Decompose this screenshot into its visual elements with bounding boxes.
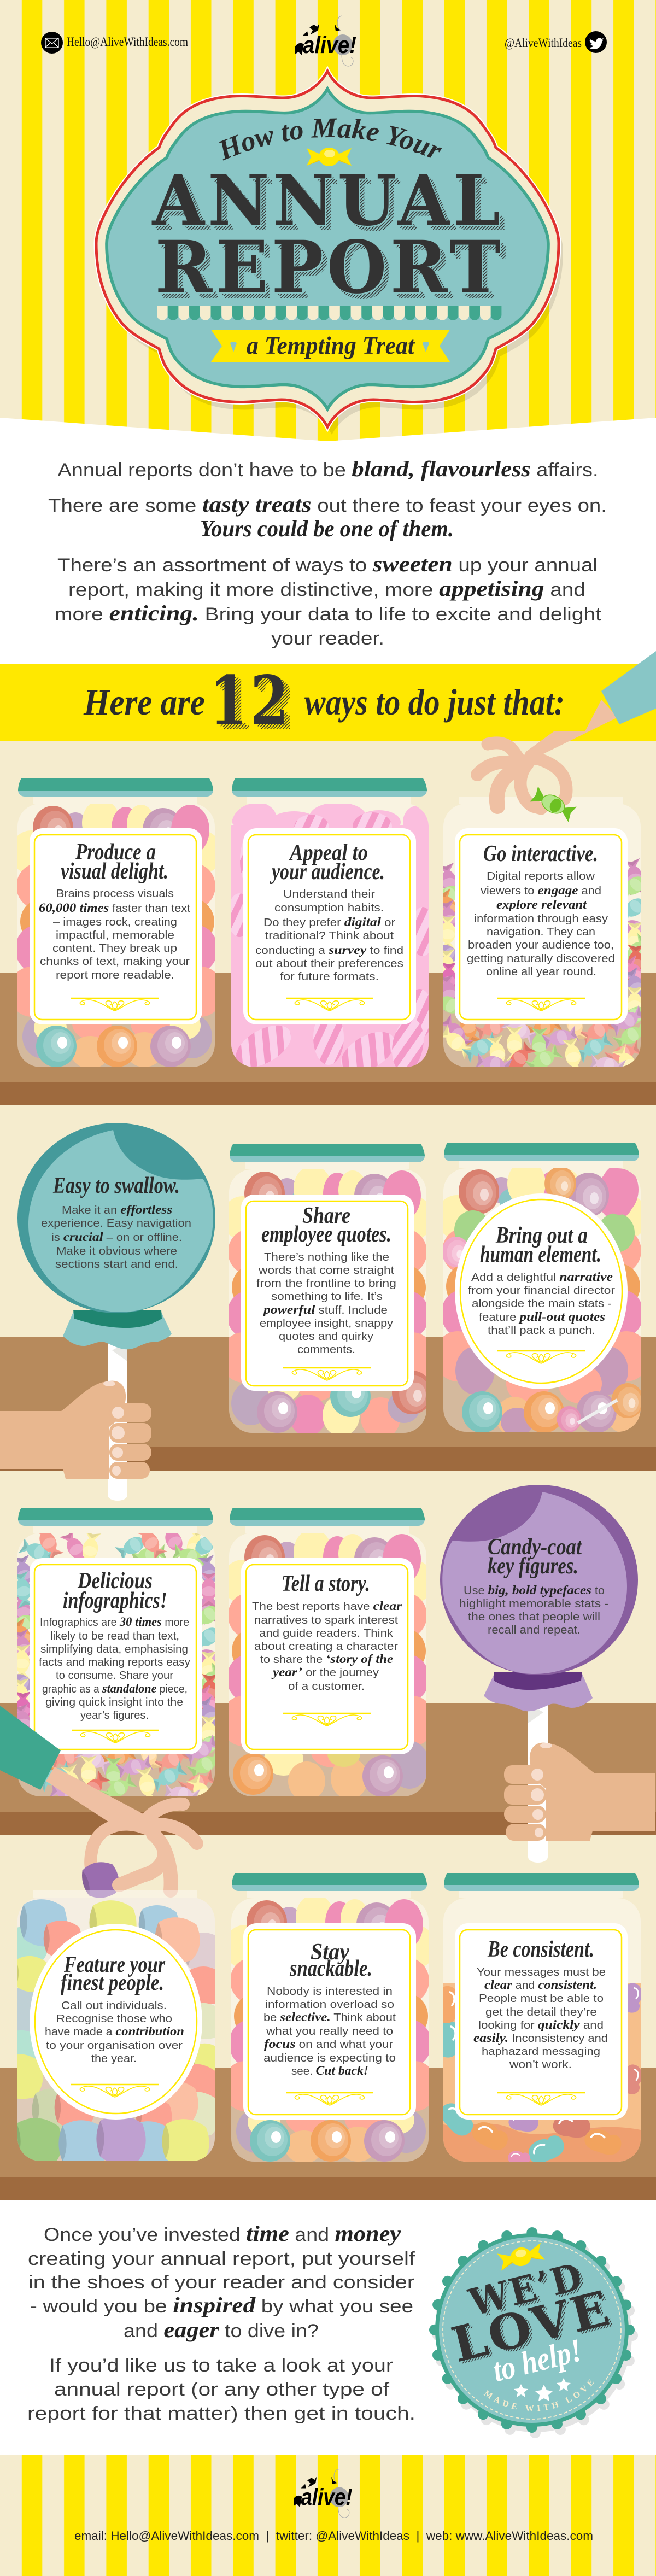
jar 3: go interactive: Go interactive. bbox=[483, 841, 598, 867]
closing text: If you’d like us to take a look at your bbox=[49, 2355, 393, 2376]
annual report heading: REPORT bbox=[156, 226, 505, 311]
lollipop: easy to swallow: Easy to swallow. bbox=[52, 1173, 180, 1198]
footer logo bbox=[294, 2469, 353, 2518]
jar 11: stay snackable: information overload so bbox=[265, 1999, 394, 2011]
yellow band background bbox=[0, 664, 656, 741]
jar 7: tell a story bbox=[220, 1508, 435, 1801]
jar 1: produce a visual delight: impactful, memorable bbox=[56, 929, 174, 941]
jar 1: produce a visual delight: chunks of text, making your bbox=[40, 956, 190, 968]
jar 6: delicious infographics: graphic as a standalone piece, bbox=[42, 1682, 188, 1695]
jar 7: tell a story: of a customer. bbox=[288, 1681, 365, 1693]
jar 7: tell a story: to share the ‘story of the bbox=[260, 1652, 393, 1666]
jar 6: delicious infographics: likely to be read than text, bbox=[50, 1630, 179, 1642]
jar 10: feature your finest people: finest people. bbox=[61, 1970, 164, 1995]
twitter contact: @AliveWithIdeas bbox=[505, 36, 582, 50]
heading: here are 12 ways bbox=[83, 661, 565, 746]
lollipop: easy to swallow: sections start and end. bbox=[55, 1258, 178, 1271]
badge: we'd love to help bbox=[429, 2227, 638, 2438]
lollipop: candy-coat key figures: Candy-coat bbox=[488, 1535, 582, 1560]
jar 12: be consistent: easily. Inconsistency and bbox=[473, 2031, 608, 2045]
jar 6: delicious infographics: to consume. Share your bbox=[56, 1670, 173, 1682]
jar 7: tell a story: narratives to spark interest bbox=[254, 1614, 398, 1626]
hand picking green candy bbox=[477, 700, 618, 822]
icon: yellow candy bbox=[307, 148, 352, 166]
closing text: report for that matter) then get in touch. bbox=[27, 2403, 415, 2424]
jar 5: bring out a human element: that’ll pack a punch. bbox=[488, 1325, 595, 1337]
jar 6: delicious infographics bbox=[17, 1508, 215, 1796]
jar 4: share employee quotes: employee insight, snappy bbox=[260, 1318, 393, 1330]
lollipop: candy-coat key figures: key figures. bbox=[488, 1554, 578, 1579]
badge headline: LOVE bbox=[446, 2279, 617, 2373]
jar 6: delicious infographics: Delicious bbox=[77, 1568, 153, 1594]
jar 4: share employee quotes: quotes and quirky bbox=[279, 1331, 373, 1343]
jar 10: feature your finest people bbox=[17, 1890, 215, 2161]
jar 4: share employee quotes: Share bbox=[302, 1203, 350, 1228]
badge headline: WE’D bbox=[467, 2256, 591, 2327]
hand picking purple candy bbox=[46, 1767, 197, 1902]
lollipop: candy-coat key figures: recall and repeat. bbox=[488, 1624, 581, 1636]
lollipop: candy-coat key figures: the ones that people will bbox=[468, 1611, 600, 1623]
closing text: and eager to dive in? bbox=[124, 2317, 319, 2342]
jar 6: delicious infographics: Infographics are 30 times more bbox=[40, 1615, 189, 1629]
jar 2: appeal to your audience: for future formats. bbox=[280, 971, 379, 983]
footer stripes bbox=[0, 2455, 656, 2576]
jar 12: be consistent: Be consistent. bbox=[487, 1937, 594, 1962]
jar 4: share employee quotes: from the frontline to bring bbox=[256, 1278, 396, 1290]
jar 7: tell a story: about creating a character bbox=[254, 1641, 398, 1653]
footer contact line: email: Hello@AliveWithIdeas.com | twitter: @AliveWithIdeas | web: www.AliveWithIdeas.com bbox=[74, 2529, 593, 2543]
awning stripes bbox=[157, 306, 501, 320]
lollipop: easy to swallow bbox=[0, 1123, 215, 1501]
jar 11: stay snackable: focus on and what your bbox=[264, 2037, 393, 2051]
annual report heading: ANNUAL bbox=[157, 166, 509, 247]
icon: stars bbox=[514, 2378, 571, 2401]
jar 1: produce a visual delight: 60,000 times faster than text bbox=[39, 901, 190, 915]
annual report heading: REPORT bbox=[159, 229, 507, 313]
jar 3: go interactive: broaden your audience too, bbox=[468, 939, 614, 951]
jar 11: stay snackable: be selective. Think about bbox=[263, 2010, 396, 2024]
icon: envelope bbox=[41, 32, 63, 54]
jar 2: appeal to your audience bbox=[227, 778, 435, 1081]
ribbon: a tempting treat bbox=[211, 330, 450, 362]
jar 6: delicious infographics: simplifying data, emphasising bbox=[40, 1643, 188, 1655]
number 12: 12 bbox=[213, 664, 295, 743]
annual report heading bbox=[152, 160, 509, 315]
jar 10: feature your finest people: to your organisation over bbox=[46, 2040, 183, 2052]
intro text: report, making it more distinctive, more appetising and bbox=[68, 576, 585, 601]
jar 4: share employee quotes: There’s nothing like the bbox=[264, 1251, 389, 1263]
annual report heading: ANNUAL bbox=[153, 161, 505, 242]
jar 11: stay snackable: what you really need to bbox=[266, 2025, 393, 2038]
jar 12: be consistent: looking for quickly and bbox=[478, 2018, 604, 2031]
lollipop: candy-coat key figures bbox=[440, 1485, 655, 1863]
jar 1: produce a visual delight: Produce a bbox=[75, 840, 156, 865]
email contact: Hello@AliveWithIdeas.com bbox=[67, 35, 188, 49]
jar 5: bring out a human element: Add a delightful narrative bbox=[471, 1270, 613, 1284]
closing text: annual report (or any other type of bbox=[54, 2379, 390, 2400]
jar 1: produce a visual delight: Brains process visuals bbox=[56, 888, 174, 900]
badge headline bbox=[439, 2249, 625, 2397]
jar 2: appeal to your audience: Do they prefer digital or bbox=[263, 915, 395, 929]
heading: here are 12 ways: ways to do just that: bbox=[304, 681, 565, 723]
lollipop: easy to swallow: Make it an effortless bbox=[62, 1203, 172, 1216]
jar 1: produce a visual delight: visual delight. bbox=[61, 859, 168, 884]
jar 7: tell a story: Tell a story. bbox=[282, 1571, 370, 1596]
jar 3: go interactive: information through easy bbox=[474, 913, 608, 925]
lollipop: easy to swallow: Make it obvious where bbox=[56, 1245, 177, 1257]
jar 3: go interactive: navigation. They can bbox=[487, 926, 595, 938]
jar 12: be consistent: People must be able to bbox=[479, 1993, 604, 2005]
title badge bbox=[94, 66, 563, 434]
icon: yellow candy bbox=[497, 2243, 545, 2271]
jar 6: delicious infographics: giving quick insight into the bbox=[45, 1696, 183, 1708]
jar 3: go interactive: getting naturally discovered bbox=[467, 953, 615, 965]
badge subtitle: how to make your: How to Make Your bbox=[219, 118, 442, 161]
jar 12: be consistent: Your messages must be bbox=[477, 1966, 606, 1978]
badge headline: LOVE bbox=[449, 2281, 620, 2375]
closing text: in the shoes of your reader and consider bbox=[28, 2272, 414, 2293]
jar 2: appeal to your audience: traditional? Think about bbox=[265, 930, 394, 942]
intro text: There’s an assortment of ways to sweeten up your annual bbox=[57, 552, 598, 576]
jar 4: share employee quotes: something to life. It’s bbox=[271, 1291, 383, 1303]
lollipop: easy to swallow: experience. Easy navigation bbox=[41, 1217, 191, 1230]
annual report heading: ANNUAL bbox=[152, 160, 504, 241]
jar 10: feature your finest people: Call out individuals. bbox=[61, 2000, 167, 2012]
jar 3: go interactive: viewers to engage and bbox=[481, 883, 601, 897]
jar 2: appeal to your audience: Appeal to bbox=[288, 840, 368, 865]
jar 4: share employee quotes: comments. bbox=[297, 1344, 355, 1356]
logo: alive: alive! bbox=[303, 32, 356, 58]
jar 2: appeal to your audience: out about their preferences bbox=[255, 958, 403, 970]
jar 4: share employee quotes: words that come straight bbox=[258, 1264, 395, 1277]
jar 4: share employee quotes: powerful stuff. Include bbox=[262, 1303, 388, 1316]
jar 2: appeal to your audience: consumption habits. bbox=[274, 902, 384, 914]
jar 1: produce a visual delight: content. They break up bbox=[52, 942, 177, 955]
jar 3: go interactive: Digital reports allow bbox=[487, 870, 595, 882]
jar 11: stay snackable: see. Cut back! bbox=[291, 2064, 368, 2077]
lollipop: easy to swallow: is crucial – on or offline. bbox=[51, 1230, 182, 1244]
number 12: 12 bbox=[216, 666, 298, 746]
jar 5: bring out a human element: human element. bbox=[480, 1242, 601, 1267]
closing text bbox=[27, 2221, 415, 2424]
jar 3: go interactive: explore relevant bbox=[496, 898, 587, 911]
jar 10: feature your finest people: Recognise those who bbox=[56, 2013, 172, 2025]
icon: twitter bird bbox=[585, 31, 607, 53]
jar 12: be consistent: won’t work. bbox=[509, 2059, 572, 2071]
jar 2: appeal to your audience: Understand their bbox=[283, 888, 375, 900]
jar 4: share employee quotes bbox=[229, 1144, 426, 1433]
jar 11: stay snackable: Stay bbox=[311, 1940, 349, 1965]
header striped background bbox=[0, 0, 656, 441]
ribbon: a tempting treat: a Tempting Treat bbox=[247, 331, 415, 359]
jar 7: tell a story: and guide readers. Think bbox=[259, 1627, 394, 1640]
jar 5: bring out a human element: alongside the main stats - bbox=[472, 1298, 612, 1310]
jar 2: appeal to your audience: conducting a survey to find bbox=[255, 943, 403, 957]
jar 11: stay snackable: audience is expecting to bbox=[263, 2052, 396, 2064]
lollipop: candy-coat key figures: highlight memorable stats - bbox=[459, 1598, 608, 1610]
jar 12: be consistent: haphazard messaging bbox=[482, 2046, 600, 2058]
jar 12: be consistent bbox=[435, 1873, 642, 2169]
intro text bbox=[48, 456, 607, 649]
sleeve: teal bbox=[601, 651, 656, 724]
footer logo: alive! bbox=[301, 2484, 353, 2510]
lollipop: candy-coat key figures: Use big, bold typefaces to bbox=[464, 1583, 605, 1597]
icon: green wrapped candy bbox=[530, 786, 577, 822]
jar 10: feature your finest people: the year. bbox=[91, 2053, 137, 2065]
annual report heading: REPORT bbox=[155, 225, 504, 310]
arc text: made with love: MADE WITH LOVE bbox=[483, 2379, 594, 2411]
jar 11: stay snackable: snackable. bbox=[289, 1956, 372, 1981]
sleeve: green bbox=[0, 1706, 61, 1790]
closing text: - would you be inspired by what you see bbox=[30, 2293, 413, 2317]
badge headline: WE’D bbox=[464, 2255, 588, 2325]
jar 12: be consistent: clear and consistent. bbox=[484, 1978, 597, 1992]
jar 6: delicious infographics: infographics! bbox=[63, 1588, 167, 1613]
closing text: Once you’ve invested time and money bbox=[44, 2221, 401, 2246]
jar 3: go interactive bbox=[443, 797, 641, 1067]
jar 4: share employee quotes: employee quotes. bbox=[261, 1222, 391, 1247]
jar 10: feature your finest people: have made a contribution bbox=[45, 2024, 184, 2038]
jar 10: feature your finest people: Feature your bbox=[63, 1952, 166, 1977]
jar 7: tell a story: The best reports have clear bbox=[252, 1599, 402, 1613]
shelves background bbox=[0, 741, 656, 2200]
intro text: your reader. bbox=[271, 628, 384, 649]
intro text: Yours could be one of them. bbox=[200, 517, 454, 542]
jar 12: be consistent: get the detail they’re bbox=[485, 2006, 597, 2018]
annual report heading: ANNUAL bbox=[155, 163, 507, 244]
jar 6: delicious infographics: facts and making reports easy bbox=[39, 1656, 190, 1668]
jar 5: bring out a human element: from your financial director bbox=[468, 1285, 615, 1297]
email contact bbox=[41, 32, 188, 54]
twitter contact bbox=[505, 31, 607, 53]
logo: alive bbox=[295, 16, 356, 66]
jar 1: produce a visual delight: – images rock, creating bbox=[53, 916, 177, 928]
intro text: more enticing. Bring your data to life to excite and delight bbox=[55, 601, 602, 625]
heading: here are 12 ways: Here are bbox=[83, 681, 205, 723]
jar 11: stay snackable bbox=[222, 1873, 437, 2163]
jar 5: bring out a human element: feature pull-out quotes bbox=[479, 1310, 605, 1324]
jar 5: bring out a human element: Bring out a bbox=[495, 1223, 588, 1248]
number 12: 12 bbox=[209, 661, 291, 741]
intro text: There are some tasty treats out there to feast your eyes on. bbox=[48, 492, 607, 517]
jar 6: delicious infographics: year’s figures. bbox=[80, 1709, 149, 1722]
jar 5: bring out a human element bbox=[435, 1143, 649, 1436]
jar 3: go interactive: online all year round. bbox=[486, 966, 596, 978]
jar 2: appeal to your audience: your audience. bbox=[270, 859, 385, 885]
jar 7: tell a story: year’ or the journey bbox=[271, 1665, 379, 1679]
badge headline: to help! bbox=[489, 2332, 585, 2388]
closing text: creating your annual report, put yourself bbox=[28, 2249, 415, 2269]
annual report heading: REPORT bbox=[161, 231, 509, 315]
jar 11: stay snackable: Nobody is interested in bbox=[267, 1986, 393, 1998]
jar 1: produce a visual delight bbox=[9, 778, 224, 1069]
icon: purple candy bbox=[79, 1858, 122, 1902]
intro text: Annual reports don’t have to be bland, flavourless affairs. bbox=[58, 456, 598, 481]
jar 1: produce a visual delight: report more readable. bbox=[56, 969, 174, 981]
